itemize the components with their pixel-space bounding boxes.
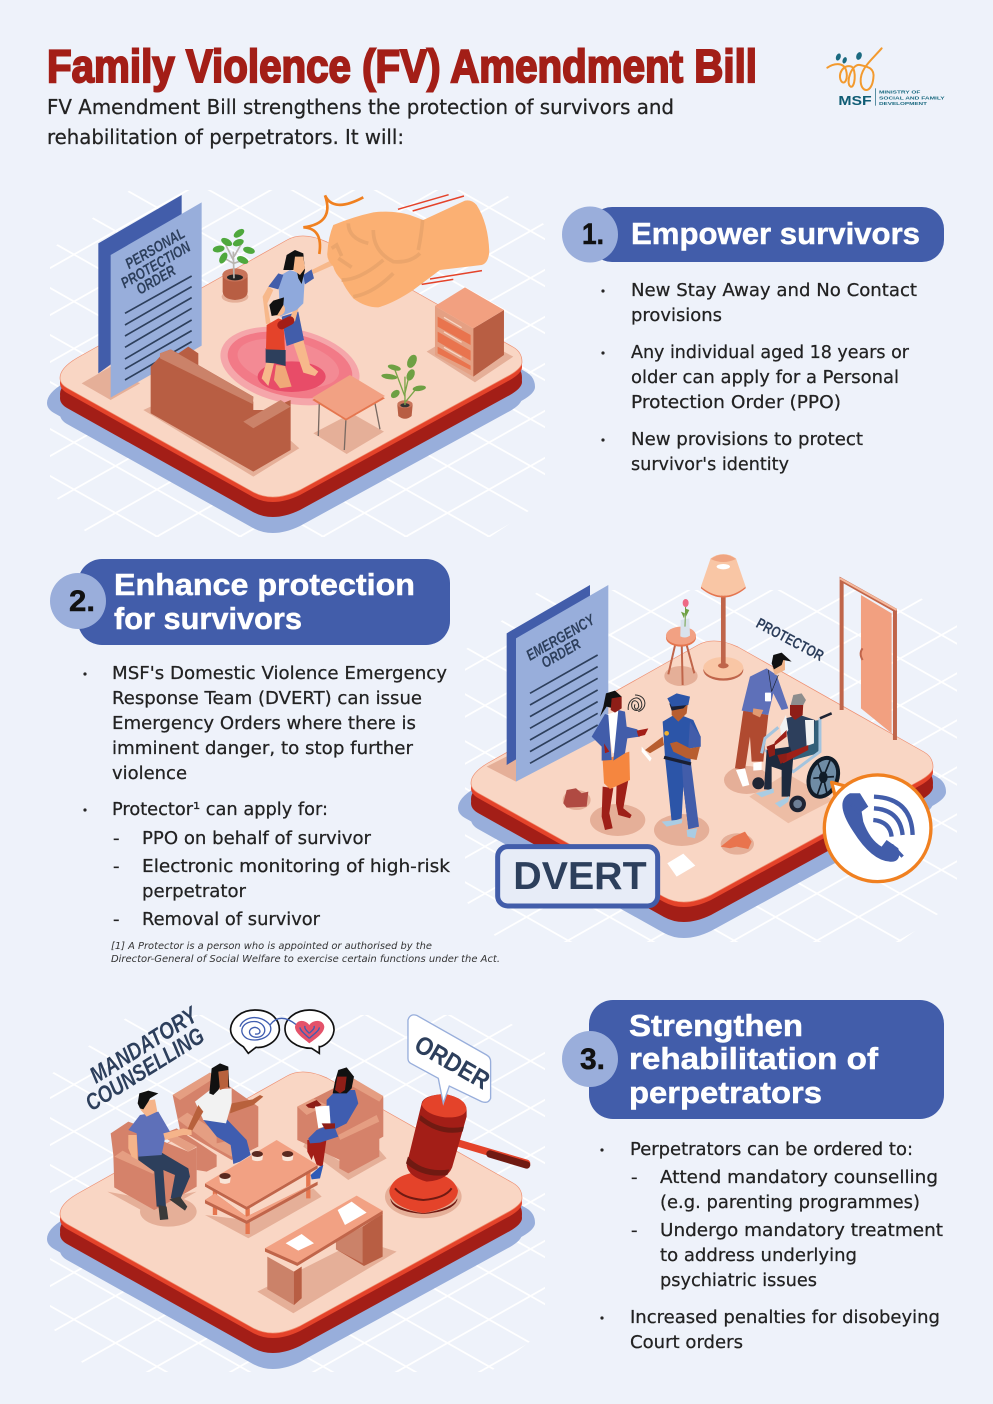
section 3 heading: 3. xyxy=(580,1043,605,1076)
section 2 heading: for survivors xyxy=(114,601,302,636)
section 2 bullet text: Removal of survivor xyxy=(142,909,321,930)
section 2 bullet text: PPO on behalf of survivor xyxy=(142,828,372,849)
subtitle xyxy=(47,95,674,149)
document: Personal Protection Order: PERSONAL xyxy=(122,225,188,273)
section 2 heading: 2. xyxy=(69,585,95,618)
document: Emergency Order: EMERGENCY xyxy=(523,611,599,664)
section 3 heading xyxy=(562,1000,944,1119)
section 1 bullet text: survivor's identity xyxy=(631,454,789,475)
fist with impact lines xyxy=(303,195,489,307)
section 2 heading xyxy=(50,559,450,645)
section 1 bullet text xyxy=(601,280,917,475)
section 3 bullet text: to address underlying xyxy=(660,1245,857,1266)
rug xyxy=(213,315,367,417)
section 2 bullet text: Response Team (DVERT) can issue xyxy=(112,688,422,709)
floor items xyxy=(563,788,754,877)
section 2 bullet text: Emergency Orders where there is xyxy=(112,713,416,734)
illustration 1: survivor and child in living room xyxy=(47,190,545,537)
logo: MSF: MSF xyxy=(838,94,872,108)
desk with papers xyxy=(257,1196,397,1313)
section 3 bullet text: Increased penalties for disobeying xyxy=(630,1307,940,1328)
table xyxy=(312,375,385,454)
logo: MSF: SOCIAL AND FAMILY xyxy=(879,95,946,101)
footnote: [1] A Protector is a person who is appointed or authorised by the xyxy=(111,941,432,952)
platform 3 xyxy=(47,1072,535,1369)
plant top xyxy=(212,227,256,303)
section 2 bullet text: MSF's Domestic Violence Emergency xyxy=(112,663,447,684)
woman and child xyxy=(262,250,336,388)
section 3 bullet text: psychiatric issues xyxy=(660,1270,817,1291)
document: Personal Protection Order: ORDER xyxy=(133,262,179,298)
logo: MSF: DEVELOPMENT xyxy=(879,101,927,107)
section 2 bullet text xyxy=(83,663,451,930)
phone call bubble icon xyxy=(824,775,931,882)
section 3 bullet text: Court orders xyxy=(630,1332,743,1353)
logo: MSF: MINISTRY OF xyxy=(879,90,920,96)
illustration 2: DVERT emergency response xyxy=(458,554,957,942)
section 1 bullet text: older can apply for a Personal xyxy=(631,367,899,388)
section 3 bullet text: Undergo mandatory treatment xyxy=(660,1220,943,1241)
coffee table xyxy=(205,1140,322,1238)
section 2 heading: Enhance protection xyxy=(114,567,415,602)
section 1 heading: 1. xyxy=(582,218,604,251)
subtitle: FV Amendment Bill strengthens the protection of survivors and xyxy=(47,95,674,119)
protector and wheelchair xyxy=(724,653,846,823)
section 3 heading: Strengthen xyxy=(629,1008,803,1043)
section 3 bullet text: Perpetrators can be ordered to: xyxy=(630,1139,913,1160)
subtitle: rehabilitation of perpetrators. It will: xyxy=(47,125,404,149)
woman survivor xyxy=(590,691,648,836)
section 3 bullet text: (e.g. parenting programmes) xyxy=(660,1192,920,1213)
section 2 bullet text: - xyxy=(113,909,120,930)
sofa xyxy=(143,347,299,477)
armchair right with counsellor xyxy=(297,1067,387,1180)
section 1 bullet text: New Stay Away and No Contact xyxy=(631,280,917,301)
door xyxy=(840,578,897,740)
platform 1 xyxy=(47,236,535,533)
document: Personal Protection Order: PROTECTION xyxy=(118,238,194,292)
section 2 bullet text: - xyxy=(113,828,120,849)
armchair left with man xyxy=(107,1091,197,1227)
section 1 heading xyxy=(562,206,944,262)
section 2 bullet text: Protector¹ can apply for: xyxy=(112,799,328,820)
document: Emergency Order xyxy=(487,585,608,782)
floor lamp xyxy=(701,554,746,681)
DVERT label: DVERT xyxy=(513,854,647,898)
section 3 bullet text xyxy=(600,1139,943,1353)
section 2 bullet text: Electronic monitoring of high-risk xyxy=(142,856,451,877)
footnote: Director-General of Social Welfare to exercise certain functions under the Act. xyxy=(111,954,500,965)
thought bubbles: tangled scribble to heart xyxy=(231,1010,334,1053)
Mandatory Counselling label: MANDATORY xyxy=(85,1001,203,1088)
plant right xyxy=(381,353,426,419)
section 2 bullet text: - xyxy=(113,856,120,877)
police officer xyxy=(642,693,709,846)
gavel xyxy=(385,1094,527,1218)
DVERT label xyxy=(498,847,658,906)
document: Emergency Order: ORDER xyxy=(538,636,584,672)
cabinet xyxy=(427,287,513,382)
section 2 bullet text: perpetrator xyxy=(142,881,247,902)
Mandatory Counselling label: COUNSELLING xyxy=(81,1022,209,1116)
section 3 bullet text: - xyxy=(631,1220,638,1241)
section 1 heading: Empower survivors xyxy=(631,216,920,251)
section 3 heading: perpetrators xyxy=(629,1075,822,1110)
document: Personal Protection Order xyxy=(82,195,202,400)
section 1 bullet text: Protection Order (PPO) xyxy=(631,392,841,413)
Protector label: PROTECTOR xyxy=(753,615,826,665)
illustration 3: mandatory counselling and court order xyxy=(47,1001,545,1372)
scribble xyxy=(628,695,645,712)
side table with rose xyxy=(664,599,698,686)
section 3 heading: rehabilitation of xyxy=(629,1041,879,1076)
platform 2 xyxy=(458,641,946,938)
title: Family Violence (FV) Amendment Bill xyxy=(47,40,757,92)
section 2 bullet text: imminent danger, to stop further xyxy=(112,738,414,759)
footnote xyxy=(111,941,500,965)
section 1 bullet text: provisions xyxy=(631,305,722,326)
section 1 bullet text: Any individual aged 18 years or xyxy=(631,342,910,363)
section 3 bullet text: Attend mandatory counselling xyxy=(660,1167,938,1188)
section 1 bullet text: New provisions to protect xyxy=(631,429,863,450)
Order speech bubble: ORDER xyxy=(410,1030,494,1095)
armchair middle with woman xyxy=(168,1063,263,1172)
logo: MSF xyxy=(827,48,946,108)
section 2 bullet text: violence xyxy=(112,763,187,784)
section 3 bullet text: - xyxy=(631,1167,638,1188)
